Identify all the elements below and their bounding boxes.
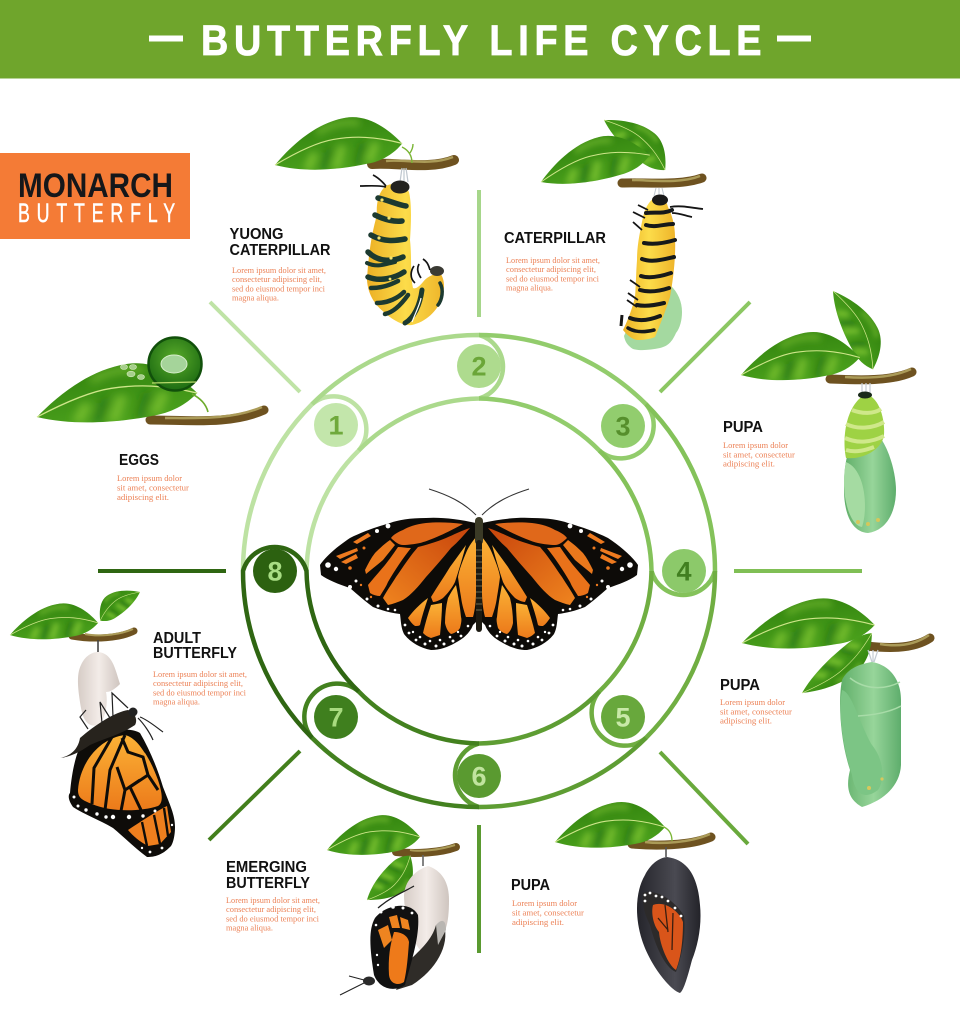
stage 7 badge: 7 bbox=[328, 702, 344, 732]
stage: young caterpillar bbox=[230, 109, 454, 325]
green chrysalis illustration bbox=[737, 592, 930, 807]
spokes bbox=[98, 190, 862, 953]
emerging butterfly heading: BUTTERFLY bbox=[226, 875, 311, 892]
adult butterfly description: Lorem ipsum dolor sit amet, bbox=[153, 669, 247, 679]
pupa description bbox=[512, 898, 584, 927]
stage 6 badge bbox=[457, 754, 501, 798]
stage: adult butterfly bbox=[7, 579, 247, 857]
eggs description: sit amet, consectetur bbox=[117, 482, 189, 492]
stage: emerging butterfly bbox=[226, 810, 456, 995]
adult butterfly heading: ADULT bbox=[153, 630, 201, 647]
species badge: monarch butterfly bbox=[0, 153, 190, 239]
cycle diagram: rings and numbered stages bbox=[243, 335, 715, 807]
central monarch butterfly bbox=[320, 489, 638, 650]
eggs illustration bbox=[31, 338, 264, 434]
adult butterfly heading bbox=[153, 630, 238, 662]
pupa description: adipiscing elit. bbox=[512, 917, 564, 927]
emerging butterfly illustration bbox=[323, 810, 456, 995]
pupa description: Lorem ipsum dolor bbox=[720, 697, 785, 707]
pupa description: sit amet, consectetur bbox=[512, 908, 584, 918]
young caterpillar description: Lorem ipsum dolor sit amet, bbox=[232, 265, 326, 275]
caterpillar description: Lorem ipsum dolor sit amet, bbox=[506, 255, 600, 265]
young caterpillar description: sed do eiusmod tempor inci bbox=[232, 284, 326, 294]
stage 2 badge: 2 bbox=[471, 352, 487, 382]
pupa description bbox=[720, 697, 792, 726]
ring segments bbox=[243, 335, 715, 807]
pupa description bbox=[723, 440, 795, 468]
caterpillar description: sed do eiusmod tempor inci bbox=[506, 274, 600, 284]
caterpillar illustration bbox=[534, 103, 703, 350]
pupa description: Lorem ipsum dolor bbox=[512, 898, 577, 908]
stage: eggs bbox=[31, 338, 264, 502]
adult butterfly description: sed do eiusmod tempor inci bbox=[153, 688, 247, 698]
emerging butterfly description: magna aliqua. bbox=[226, 922, 273, 932]
young caterpillar heading bbox=[230, 226, 330, 259]
caterpillar heading: CATERPILLAR bbox=[504, 230, 606, 247]
stage 7 badge bbox=[314, 695, 358, 739]
adult butterfly illustration bbox=[7, 579, 175, 857]
pupa heading: PUPA bbox=[723, 419, 763, 436]
stage 8 badge: 8 bbox=[267, 556, 283, 586]
emerging butterfly heading bbox=[226, 859, 311, 892]
adult butterfly description: magna aliqua. bbox=[153, 696, 200, 706]
eggs description bbox=[117, 473, 189, 502]
stage 2 badge bbox=[457, 344, 501, 388]
eggs heading: EGGS bbox=[119, 452, 159, 469]
title: BUTTERFLY LIFE CYCLE bbox=[201, 16, 762, 65]
young caterpillar heading: YUONG bbox=[230, 226, 284, 243]
stage 8 badge bbox=[253, 549, 297, 593]
stage: caterpillar bbox=[504, 103, 703, 350]
young caterpillar description: magna aliqua. bbox=[232, 292, 279, 302]
pupa description: adipiscing elit. bbox=[723, 458, 775, 468]
stage 3 badge: 3 bbox=[615, 412, 631, 442]
dark chrysalis illustration bbox=[551, 796, 711, 993]
adult butterfly heading: BUTTERFLY bbox=[153, 645, 238, 662]
stage 4 badge bbox=[662, 549, 706, 593]
adult butterfly description bbox=[153, 669, 247, 706]
pupa heading: PUPA bbox=[511, 877, 550, 894]
stage 5 badge bbox=[601, 695, 645, 739]
pupa heading: PUPA bbox=[720, 677, 760, 694]
pupa description: adipiscing elit. bbox=[720, 716, 772, 726]
pupa description: Lorem ipsum dolor bbox=[723, 440, 788, 450]
stage: pupa forming bbox=[723, 281, 912, 533]
species badge: monarch butterfly: MONARCH bbox=[18, 167, 173, 205]
green striped pupa illustration bbox=[736, 281, 912, 533]
emerging butterfly heading: EMERGING bbox=[226, 859, 307, 876]
pupa description: sit amet, consectetur bbox=[723, 450, 795, 460]
young caterpillar heading: CATERPILLAR bbox=[230, 242, 330, 259]
caterpillar description bbox=[506, 255, 600, 292]
adult butterfly description: consectetur adipiscing elit, bbox=[153, 678, 243, 688]
stage 4 badge: 4 bbox=[676, 556, 692, 586]
stage 1 badge: 1 bbox=[328, 410, 344, 440]
emerging butterfly description: Lorem ipsum dolor sit amet, bbox=[226, 895, 320, 905]
emerging butterfly description bbox=[226, 895, 320, 932]
stage: green chrysalis bbox=[720, 592, 930, 807]
header banner bbox=[0, 0, 960, 78]
pupa description: sit amet, consectetur bbox=[720, 706, 792, 716]
young caterpillar illustration bbox=[269, 109, 454, 325]
emerging butterfly description: sed do eiusmod tempor inci bbox=[226, 914, 320, 924]
stage: dark chrysalis bbox=[511, 796, 711, 993]
stage 3 badge bbox=[601, 404, 645, 448]
emerging butterfly description: consectetur adipiscing elit, bbox=[226, 904, 316, 914]
eggs description: adipiscing elit. bbox=[117, 492, 169, 502]
caterpillar description: consectetur adipiscing elit, bbox=[506, 264, 596, 274]
species badge: monarch butterfly: BUTTERFLY bbox=[18, 197, 175, 228]
caterpillar description: magna aliqua. bbox=[506, 282, 553, 292]
stage 6 badge: 6 bbox=[471, 762, 487, 792]
eggs description: Lorem ipsum dolor bbox=[117, 473, 182, 483]
stage 1 badge bbox=[314, 403, 358, 447]
stage 5 badge: 5 bbox=[615, 702, 631, 732]
young caterpillar description: consectetur adipiscing elit, bbox=[232, 274, 322, 284]
young caterpillar description bbox=[232, 265, 326, 302]
